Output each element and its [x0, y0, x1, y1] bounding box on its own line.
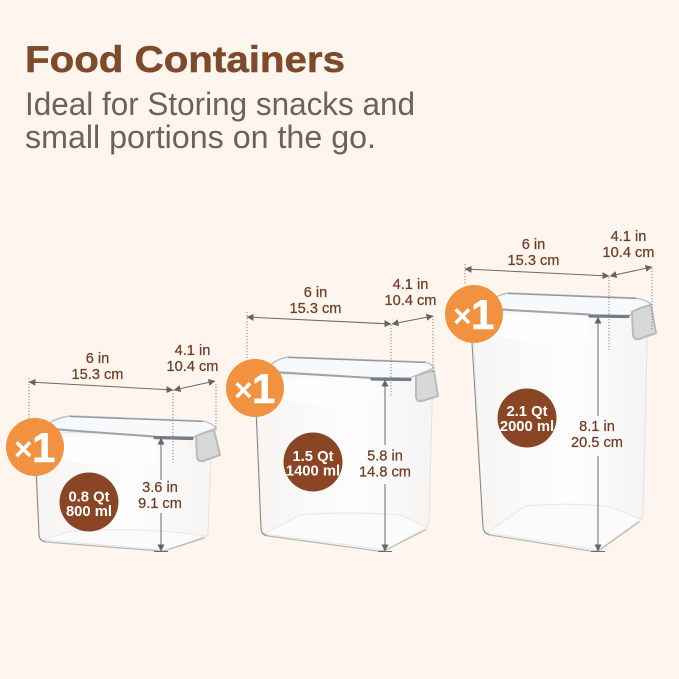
dimension: depth 4.1 in: 10.4 cm	[385, 293, 436, 309]
dimension: height 5.8 in: 14.8 cm	[359, 464, 411, 480]
dimension: width 6 in: 15.3 cm	[508, 253, 559, 269]
quantity badge: x1: 1	[471, 291, 494, 338]
dimension: height 3.6 in: 3.6 in	[142, 480, 178, 496]
quantity badge: x1: 1	[252, 365, 275, 412]
container: 1.5 Qt	[256, 357, 438, 551]
dimension: depth 4.1 in	[385, 277, 436, 397]
quantity badge: x1	[6, 418, 64, 476]
dimension: height 3.6 in: 9.1 cm	[138, 496, 182, 512]
capacity badge: 1.5 Qt: 1.5 Qt	[292, 449, 334, 465]
dimension: width 6 in: 15.3 cm	[290, 301, 341, 317]
quantity badge: x1: ×	[234, 372, 253, 408]
quantity badge: x1: ×	[14, 431, 33, 467]
dimension: depth 4.1 in: 4.1 in	[393, 277, 428, 293]
dimension: width 6 in: 6 in	[86, 351, 109, 367]
dimension: height 8.1 in	[571, 317, 623, 552]
capacity badge: 1.5 Qt: 1400 ml	[286, 464, 340, 480]
subtitle	[25, 86, 415, 155]
quantity badge: x1: 1	[32, 424, 55, 471]
dimension: width 6 in: 6 in	[522, 237, 545, 253]
subtitle: Ideal for Storing snacks and	[25, 86, 415, 122]
dimension: width 6 in	[29, 351, 173, 418]
small container group	[6, 343, 220, 552]
dimension: width 6 in	[465, 237, 609, 285]
capacity badge: 2.1 Qt: 2000 ml	[500, 419, 554, 435]
title: Food Containers	[25, 39, 345, 80]
dimension: height 8.1 in: 20.5 cm	[571, 435, 623, 451]
dimension: height 3.6 in	[138, 438, 182, 552]
dimension: width 6 in: 15.3 cm	[72, 367, 123, 383]
capacity badge: 2.1 Qt: 2.1 Qt	[506, 404, 548, 420]
dimension: height 5.8 in: 5.8 in	[367, 448, 403, 464]
dimension: width 6 in: 6 in	[304, 285, 327, 301]
dimension: depth 4.1 in: 4.1 in	[175, 343, 210, 359]
dimension: height 8.1 in: 8.1 in	[579, 419, 615, 435]
capacity badge: 0.8 Qt: 800 ml	[66, 504, 112, 520]
container: 2.1 Qt	[472, 293, 656, 551]
large container group	[445, 229, 656, 552]
dimension: depth 4.1 in: 10.4 cm	[603, 245, 654, 261]
capacity badge: 2.1 Qt	[498, 388, 556, 448]
dimension: depth 4.1 in	[603, 229, 654, 350]
dimension: height 5.8 in	[359, 380, 411, 552]
quantity badge: x1	[445, 285, 503, 343]
capacity badge: 0.8 Qt	[60, 472, 118, 532]
medium container group	[226, 277, 438, 552]
container: 0.8 Qt	[36, 416, 220, 551]
quantity badge: x1	[226, 359, 284, 417]
capacity badge: 1.5 Qt	[284, 432, 342, 492]
quantity badge: x1: ×	[453, 298, 472, 334]
capacity badge: 0.8 Qt: 0.8 Qt	[68, 490, 110, 506]
dimension: depth 4.1 in: 10.4 cm	[167, 359, 218, 375]
dimension: width 6 in	[247, 285, 391, 358]
dimension: depth 4.1 in	[167, 343, 218, 463]
subtitle: small portions on the go.	[25, 119, 376, 155]
dimension: depth 4.1 in: 4.1 in	[611, 229, 646, 245]
